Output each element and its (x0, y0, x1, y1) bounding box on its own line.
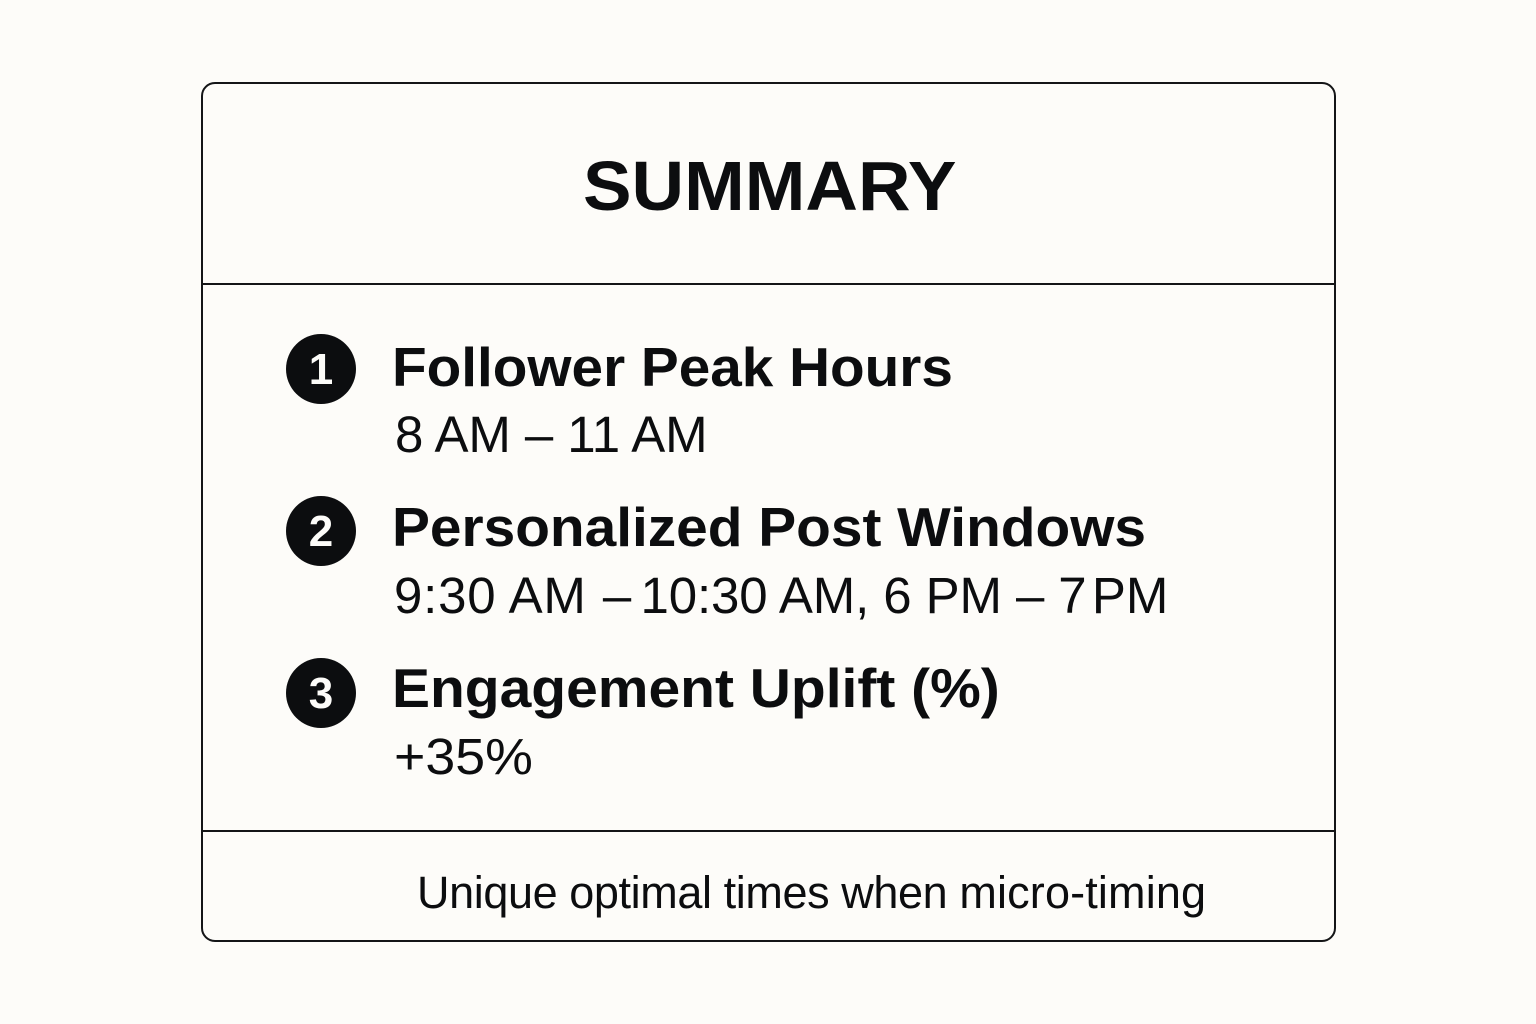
panel: summary card (201, 82, 1336, 942)
item 2: personalized post windows (286, 496, 1168, 624)
item 2 value: 9:30 AM – 10:30 AM, 6 PM – 7 PM (394, 567, 1168, 624)
icon: number 2 badge (286, 496, 356, 566)
item 1 value: 8 AM – 11 AM (395, 406, 708, 463)
icon: number 1 badge (286, 334, 356, 404)
icon: number 1 badge: 1 (309, 345, 333, 394)
item 3 value: +35% (394, 728, 533, 785)
item 1 heading: Follower Peak Hours (392, 336, 953, 398)
title: SUMMARY (583, 147, 956, 225)
icon: number 3 badge: 3 (309, 669, 333, 718)
item 3: engagement uplift (286, 657, 1000, 785)
item 2 heading: Personalized Post Windows (392, 496, 1146, 558)
item 3 heading: Engagement Uplift (%) (392, 657, 1000, 719)
icon: number 3 badge (286, 658, 356, 728)
footer note: Unique optimal times when micro-timing (417, 867, 1206, 918)
icon: number 2 badge: 2 (309, 507, 333, 556)
item 1: follower peak hours (286, 334, 953, 463)
